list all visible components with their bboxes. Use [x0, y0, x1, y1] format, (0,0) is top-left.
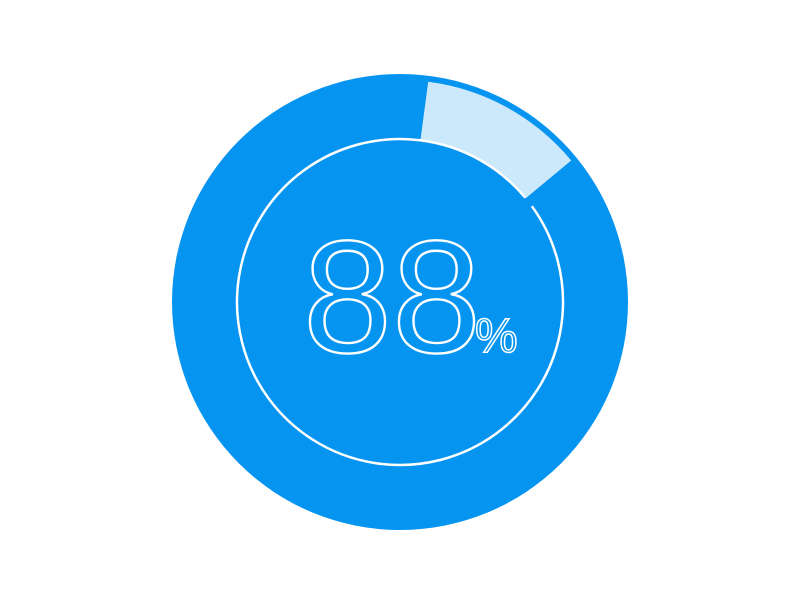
light remaining segment (12%)	[420, 82, 571, 198]
inner white ring	[172, 74, 628, 530]
percentage label: 88	[303, 207, 481, 386]
outer blue disc	[172, 74, 628, 530]
percentage label: %	[475, 310, 518, 363]
